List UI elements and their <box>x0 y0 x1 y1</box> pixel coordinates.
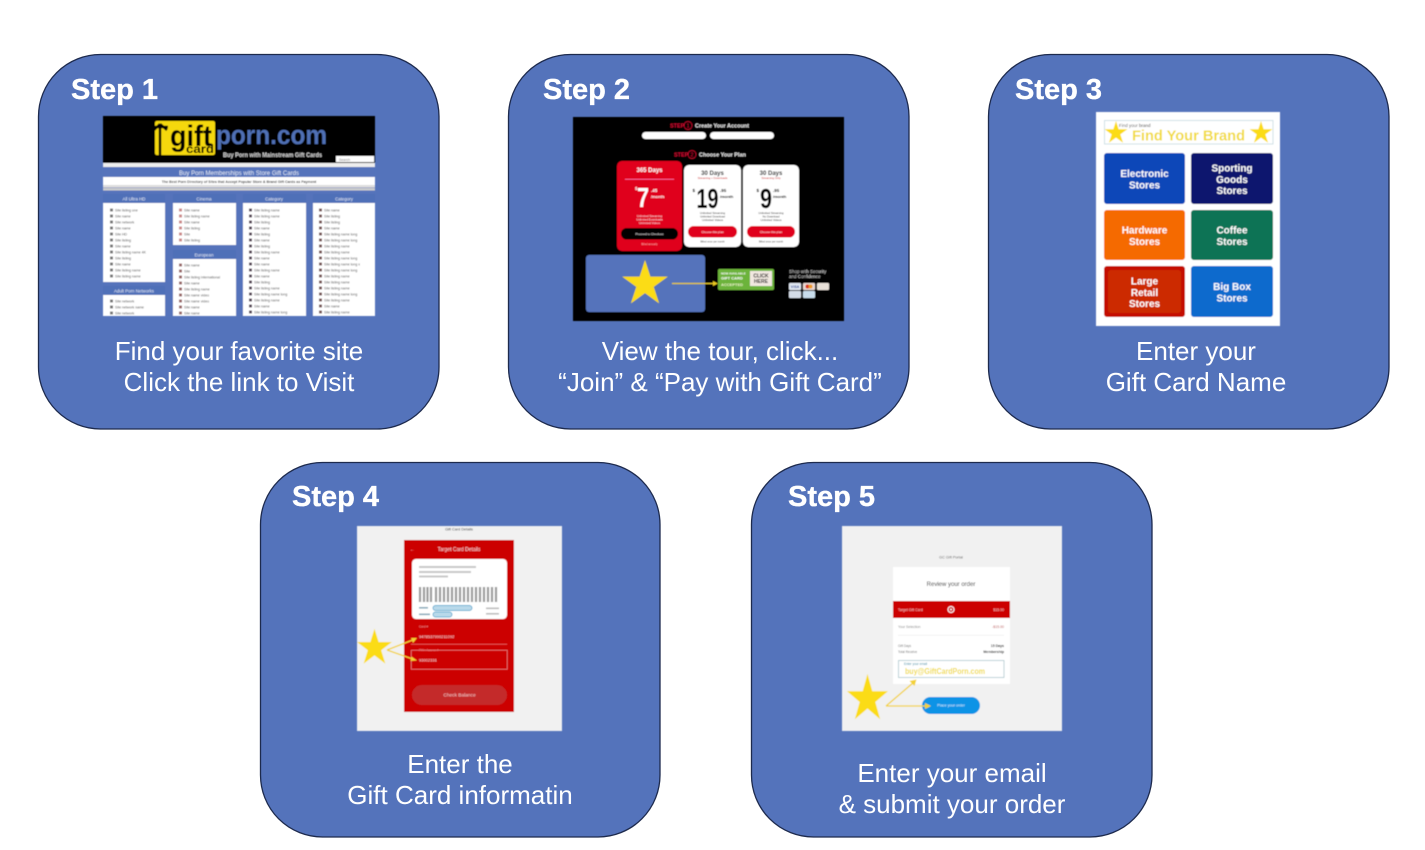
screenshot: gift card details form: 9478537990211092 <box>419 634 455 639</box>
column: third category list: Site listing name <box>254 268 280 272</box>
column: fourth category list: Site listing name long <box>324 256 357 260</box>
caption: step 1: Click the link to Visit <box>124 367 355 397</box>
screenshot: order review form: -$15.00 <box>992 625 1004 629</box>
screenshot: order review form: Gift Days <box>898 644 912 648</box>
column: fourth category list: Site listing name <box>324 250 350 254</box>
column: third category list: Site name <box>254 238 270 242</box>
screenshot: plan selection page: STEP <box>674 152 689 158</box>
pay with gift card button: CLICK <box>753 274 769 280</box>
screenshot: gift card details form: Card # <box>419 624 428 628</box>
screenshot: order review form: 15 Days <box>991 644 1004 648</box>
tile: hardware stores <box>1104 210 1185 260</box>
security text and payment icons: Shop with Security <box>789 269 827 274</box>
screenshot: order review form: Your Selection <box>898 625 920 629</box>
security text and payment icons: and Confidence <box>789 274 821 279</box>
column: fourth category list: Site listing name <box>324 244 350 248</box>
plan card: 30 days, $19.95: Unlimited Download <box>700 214 725 218</box>
panel: step 3 <box>988 54 1389 429</box>
column: third category list: Site name <box>254 262 270 266</box>
caption: step 3: Enter your <box>1136 336 1256 366</box>
plan card: 30 days, $9.95: .95 <box>773 188 780 193</box>
column: fourth category list: Site listing name long <box>324 232 357 236</box>
star with arrows <box>847 674 931 719</box>
plan card: 365 days: Unlimited Videos <box>639 221 661 225</box>
plan card: 30 days, $19.95: Billed once per month <box>700 240 725 244</box>
column: first category list: Site network <box>115 312 135 316</box>
plan card: 30 days, $9.95: 30 Days <box>760 171 783 177</box>
security text and payment icons: VISA <box>791 285 800 289</box>
column: third category list: Site name <box>254 226 270 230</box>
screenshot: order review form: Target Gift Card <box>898 608 923 612</box>
screenshot: plan selection page: Create Your Account <box>695 124 749 130</box>
screenshot: brand category chooser: Find Your Brand <box>1132 128 1245 144</box>
column: fourth category list: Site listing name long <box>324 268 357 272</box>
tile: sporting goods stores: Stores <box>1216 186 1248 197</box>
column: third category list: Site name <box>254 304 270 308</box>
security text and payment icons <box>789 269 829 298</box>
plan card: 30 days, $9.95: Choose this plan <box>760 230 782 234</box>
column: first category list: Site name <box>115 262 131 266</box>
caption: step 1: Find your favorite site <box>115 336 363 366</box>
column: third category list: Site listing name <box>254 298 280 302</box>
star with arrows <box>357 629 417 664</box>
screenshot: gift card details form <box>357 526 562 731</box>
column: third category list: Site name <box>254 274 270 278</box>
tile: large retail stores: Retail <box>1131 288 1158 299</box>
screenshot: order review form: $15.00 <box>993 608 1004 612</box>
column: second category lists: Cinema <box>196 196 212 202</box>
tile: electronic stores: Stores <box>1129 180 1160 192</box>
column: third category list: Site listing <box>254 244 270 248</box>
plan card: 365 days: Unlimited Streaming <box>637 214 663 218</box>
tile: large retail stores: Large <box>1131 276 1158 288</box>
email field <box>898 660 1004 678</box>
screenshot: gift card details form: 93002331 <box>419 658 438 662</box>
caption: step 4: Enter the <box>407 749 513 779</box>
screenshot: gift card directory site: card <box>186 142 214 156</box>
tile: sporting goods stores: Goods <box>1216 175 1248 186</box>
plan card: 30 days, $19.95: $ <box>692 188 696 193</box>
column: fourth category list: Site listing name <box>324 286 350 290</box>
caption: step 5: Enter your email <box>857 758 1047 788</box>
column: first category list: Site name <box>115 244 131 248</box>
screenshot: gift card directory site: gift <box>170 120 212 153</box>
column: second category lists: Site name video <box>184 300 209 304</box>
screenshot: brand category chooser <box>1096 112 1280 326</box>
column: fourth category list: Site name <box>324 226 340 230</box>
column: second category lists: Site listing <box>184 238 200 242</box>
blue callout box with star <box>586 255 705 312</box>
plan card: 30 days, $19.95: Streaming + Downloads <box>698 176 728 180</box>
heading: step 3: Step 3 <box>1015 74 1102 106</box>
screenshot: brand category chooser: Find your brand <box>1119 123 1151 128</box>
caption: step 5: & submit your order <box>839 789 1066 819</box>
caption: step 3: Gift Card Name <box>1106 367 1286 397</box>
plan card: 30 days, $9.95: No Download <box>763 214 780 218</box>
caption: step 4: Gift Card informatin <box>347 780 573 810</box>
column: second category lists: Site <box>184 232 190 236</box>
column: third category list: Site listing name <box>254 214 280 218</box>
plan card: 30 days, $9.95: /month <box>773 194 787 199</box>
column: fourth category list: Site listing name long <box>324 292 357 296</box>
plan card: 30 days, $9.95: 9 <box>760 183 772 214</box>
plan card: 30 days, $19.95: .95 <box>720 188 727 193</box>
column: third category list: Site listing name <box>254 250 280 254</box>
screenshot: gift card directory site <box>103 116 375 316</box>
column: first category list: Site network <box>115 300 135 304</box>
column: third category list: Site listing name long <box>254 310 287 314</box>
plan card: 30 days, $19.95: 30 Days <box>701 171 725 177</box>
screenshot: plan selection page: 1 <box>686 124 690 130</box>
column: third category list: Site listing <box>254 220 270 224</box>
screenshot: gift card directory site: Search <box>339 158 350 162</box>
plan card: 365 days: 365 Days <box>636 168 663 174</box>
plan card: 365 days: Proceed to Checkout <box>635 232 664 236</box>
screenshot: plan selection page: 2 <box>690 152 694 158</box>
plan card: 365 days: .45 <box>651 188 658 193</box>
barcode <box>420 587 496 602</box>
column: second category lists: Site <box>184 270 190 274</box>
tile: hardware stores: Hardware <box>1122 226 1167 236</box>
panel: step 5 <box>752 462 1152 837</box>
column: first category list: Site name <box>115 226 131 230</box>
column: first category list: Site HD <box>115 232 128 236</box>
heading: step 1: Step 1 <box>71 74 158 106</box>
plan card: 30 days, $9.95: Billed once per month <box>759 240 784 244</box>
column: fourth category list: Site listing name <box>324 310 350 314</box>
highlighted card numbers <box>419 606 499 617</box>
pay with gift card button: GIFT CARD <box>721 276 743 280</box>
caption: step 2: “Join” & “Pay with Gift Card” <box>558 367 882 397</box>
column: third category list: Site listing <box>254 232 270 236</box>
caption: step 2: View the tour, click... <box>602 336 838 366</box>
column: fourth category list: Site listing name <box>324 280 350 284</box>
tile: big box stores: Big Box <box>1213 282 1251 293</box>
column: first category list <box>103 194 165 316</box>
screenshot: plan selection page: Choose Your Plan <box>699 152 747 158</box>
column: second category lists: Site name <box>184 208 200 212</box>
plan card: 365 days: /month <box>651 194 665 199</box>
pay with gift card button <box>718 269 774 290</box>
screenshot: gift card details form: ← <box>410 547 415 553</box>
column: third category list: Site listing <box>254 280 270 284</box>
column: fourth category list <box>313 194 375 316</box>
tile: large retail stores <box>1104 266 1185 317</box>
plan card: 30 days, $19.95: Choose this plan <box>701 230 724 234</box>
column: second category lists: Site listing <box>184 226 200 230</box>
email field: buy@GiftCardPorn.com <box>905 667 985 676</box>
column: second category lists: Site listing international <box>184 276 220 280</box>
column: second category lists: European <box>194 252 214 258</box>
screenshot: order review form: Membership <box>983 650 1004 654</box>
pay with gift card button: ACCEPTED <box>721 282 743 287</box>
plan card: 30 days, $19.95: 19 <box>696 183 718 214</box>
plan card: 365 days: Billed annually <box>641 243 658 246</box>
screenshot: gift card directory site: Buy Porn with Mainstream Gift Cards <box>223 153 323 159</box>
tile: hardware stores: Stores <box>1129 237 1160 248</box>
screenshot: plan selection page <box>573 117 844 321</box>
panel: step 1 <box>38 54 439 429</box>
plan card: 30 days, $19.95: Unlimited Videos <box>702 218 724 222</box>
arrow: star to gift card button <box>672 282 714 284</box>
column: second category lists: Site name <box>184 220 200 224</box>
column: first category list: Site listing one <box>115 208 138 212</box>
column: fourth category list: Site listing <box>324 214 340 218</box>
screenshot: order review form: Review your order <box>927 582 975 588</box>
tile: sporting goods stores <box>1191 153 1273 204</box>
pay with gift card button: NOW AVAILABLE <box>721 272 746 276</box>
place order button: Place your order <box>937 704 966 708</box>
screenshot: gift card details form: Gift Card Details <box>445 528 473 532</box>
panel: step 2 <box>508 54 909 429</box>
column: second category lists: Site name <box>184 282 200 286</box>
plan card: 30 days, $9.95: Unlimited Streaming <box>758 211 784 215</box>
column: third category list: Category <box>265 196 284 202</box>
column: first category list: Site listing name <box>115 274 141 278</box>
column: third category list: Site listing name long <box>254 292 287 296</box>
plan card: 30 days, $9.95: $ <box>756 188 760 193</box>
column: second category lists: Site name <box>184 312 200 316</box>
tile: electronic stores: Electronic <box>1120 169 1169 180</box>
tile: coffee stores: Coffee <box>1216 226 1248 236</box>
plan card: 365 days: 7 <box>637 182 649 213</box>
screenshot: order review form <box>842 526 1062 731</box>
plan card: 365 days: $ <box>635 186 638 191</box>
screenshot: gift card directory site: porn.com <box>216 120 327 150</box>
column: fourth category list: Site name <box>324 208 340 212</box>
screenshot: gift card details form: PIN / Access # <box>419 648 439 652</box>
column: first category list: Site network name <box>115 306 144 310</box>
screenshot: gift card directory site: The Best Porn Directory of Sites that Accept Popular Store & Brand Gift Cards as Payment <box>162 180 317 184</box>
column: first category list: Adult Porn Networks <box>114 288 155 294</box>
column: third category list <box>243 194 306 316</box>
screenshot: order review form: GC Gift Portal <box>939 556 963 560</box>
heading: step 5: Step 5 <box>788 481 875 513</box>
column: second category lists: Site name video <box>184 294 209 298</box>
column: first category list: Site listing name <box>115 268 141 272</box>
column: fourth category list: Site name <box>324 304 340 308</box>
plan card: 365 days: Unlimited Downloads <box>636 218 663 222</box>
tile: electronic stores <box>1104 153 1185 204</box>
column: fourth category list: Category <box>335 196 354 202</box>
screenshot: gift card directory site: Buy Porn Memberships with Store Gift Cards <box>179 171 299 177</box>
heading: step 2: Step 2 <box>543 74 630 106</box>
column: first category list: Site listing <box>115 256 131 260</box>
panel: step 4 <box>260 462 660 837</box>
plan card: 30 days, $9.95: Streaming Only <box>761 176 781 180</box>
column: third category list: Site name <box>254 256 270 260</box>
column: fourth category list: Site listing <box>324 220 340 224</box>
tile: sporting goods stores: Sporting <box>1211 164 1253 174</box>
column: first category list: Site network <box>115 220 135 224</box>
plan card: 365 days <box>617 161 682 251</box>
tile: coffee stores <box>1191 210 1273 260</box>
plan card: 30 days, $19.95: /month <box>720 194 734 199</box>
screenshot: gift card details form: Check Balance <box>443 692 476 698</box>
pay with gift card button: HERE <box>754 279 769 285</box>
column: third category list: Site listing name <box>254 208 280 212</box>
tile: big box stores: Stores <box>1216 294 1248 304</box>
column: fourth category list: Site listing name <box>324 298 350 302</box>
tile: large retail stores: Stores <box>1129 299 1160 310</box>
email field: Enter your email <box>904 662 927 666</box>
screenshot: plan selection page: STEP <box>670 124 685 130</box>
column: first category list: All Ultra HD <box>123 196 145 202</box>
column: fourth category list: Site listing name long <box>324 238 357 242</box>
plan card: 30 days, $9.95: Unlimited Videos <box>761 218 782 222</box>
heading: step 4: Step 4 <box>292 481 379 513</box>
tile: coffee stores: Stores <box>1216 237 1248 248</box>
screenshot: order review form: Total Receive <box>898 650 917 654</box>
column: fourth category list: Site listing name <box>324 274 350 278</box>
screenshot: gift card details form: Target Card Details <box>438 547 481 553</box>
column: second category lists: Site listing name <box>184 288 210 292</box>
column: first category list: Site listing name 4K <box>115 250 147 254</box>
column: second category lists: Site name <box>184 264 200 268</box>
tile: big box stores <box>1191 266 1273 317</box>
plan card: 30 days, $9.95 <box>743 165 799 247</box>
column: second category lists: Site name <box>184 306 200 310</box>
column: second category lists: Site listing name <box>184 214 210 218</box>
plan card: 30 days, $19.95: Unlimited Streaming <box>700 211 726 215</box>
column: fourth category list: Site listing name long x <box>324 262 360 266</box>
column: third category list: Site listing name <box>254 286 280 290</box>
column: first category list: Site listing <box>115 238 131 242</box>
plan card: 30 days, $19.95 <box>684 165 741 247</box>
place order button <box>922 697 980 714</box>
column: first category list: Site name <box>115 214 131 218</box>
column: second category lists <box>173 194 236 316</box>
